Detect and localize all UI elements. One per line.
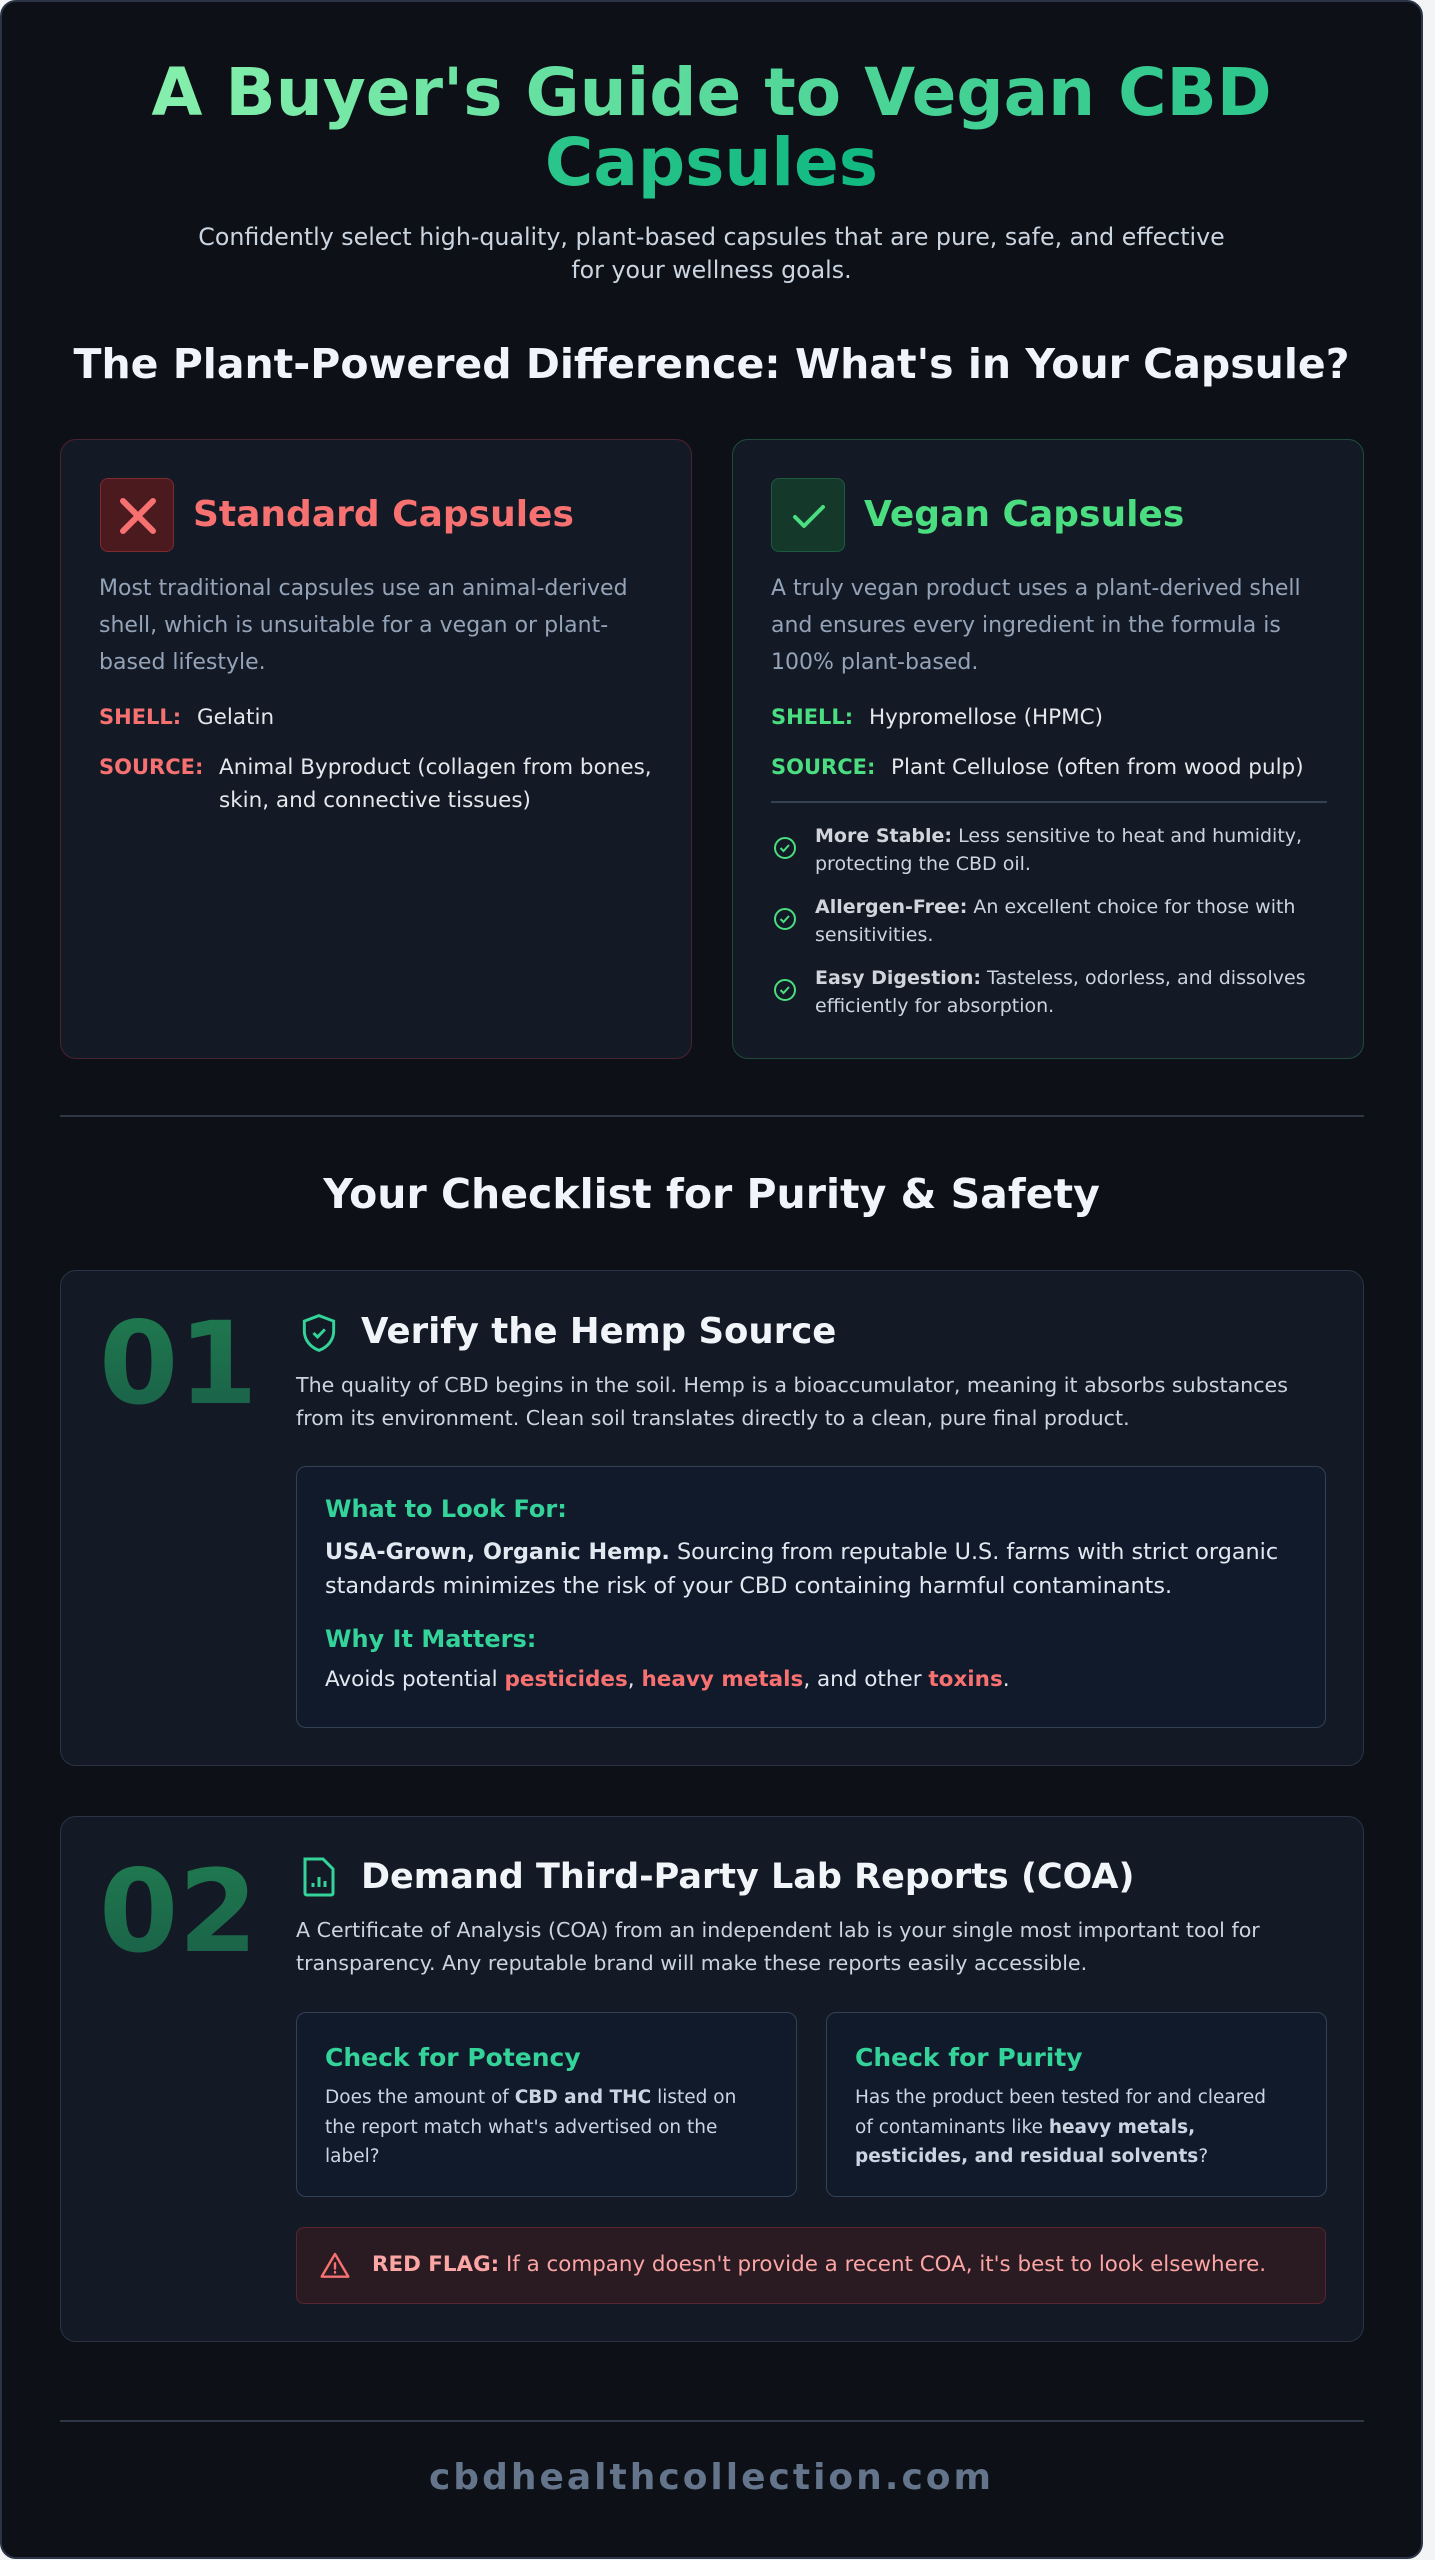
bullet: more stable: More Stable: Less sensitive to heat and humidity, protecting the CBD oil. — [815, 825, 1302, 875]
description: Most traditional capsules use an animal-derived shell, which is unsuitable for a vegan or plant-based lifestyle. — [99, 576, 628, 675]
box: purity: Check for Purity — [855, 2043, 1083, 2072]
section heading: checklist: Your Checklist for Purity & Safety — [323, 1170, 1100, 1218]
panel: vegan capsules — [732, 439, 1364, 1059]
icon: check — [771, 478, 845, 552]
spec: shell: SHELL: — [771, 705, 853, 729]
spec: shell — [99, 705, 274, 730]
panel: step 01 — [60, 1270, 1364, 1766]
section heading: difference: The Plant-Powered Difference: What's in Your Capsule? — [73, 340, 1350, 388]
step number 02: 02 — [99, 1845, 258, 1978]
box: purity — [826, 2012, 1327, 2197]
why it matters: Why It Matters: — [325, 1625, 536, 1653]
subtitle: Confidently select high-quality, plant-based capsules that are pure, safe, and effective — [198, 223, 1225, 251]
icon: x mark — [100, 478, 174, 552]
title: Capsules — [545, 124, 878, 201]
panel: standard capsules — [60, 439, 692, 1059]
paragraph: A Certificate of Analysis (COA) from an independent lab is your single most important tool for transparency. Any reputable brand will make these reports easily accessible. — [296, 1918, 1260, 1975]
callout: red flag — [296, 2227, 1326, 2304]
subtitle: for your wellness goals. — [571, 256, 852, 284]
spec: shell: Gelatin — [197, 705, 274, 730]
heading: lab reports: Demand Third-Party Lab Reports (COA) — [361, 1857, 1135, 1897]
box: potency: Check for Potency — [325, 2043, 581, 2072]
heading: standard: Standard Capsules — [193, 494, 574, 535]
what to look for: What to Look For: — [325, 1495, 567, 1523]
callout: red flag: RED FLAG: If a company doesn't provide a recent COA, it's best to look elsewhere. — [372, 2252, 1266, 2277]
info box: Avoids potential pesticides, heavy metals, and other toxins. — [325, 1667, 1010, 1692]
subtitle — [198, 223, 1225, 284]
spec: shell: Hypromellose (HPMC) — [869, 705, 1103, 730]
bullet: allergen-free: Allergen-Free: An excellent choice for those with sensitivities. — [815, 896, 1295, 946]
paragraph: The quality of CBD begins in the soil. Hemp is a bioaccumulator, meaning it absorbs substances from its environment. Clean soil translates directly to a clean, pure final product. — [296, 1373, 1288, 1430]
spec: source: SOURCE: — [99, 755, 203, 779]
icon: shield — [302, 1314, 336, 1352]
spec: source: SOURCE: — [771, 755, 875, 779]
step number 01: 01 — [99, 1297, 258, 1430]
footer: website: cbdhealthcollection.com — [429, 2457, 994, 2498]
spec: source: Plant Cellulose (often from wood pulp) — [891, 755, 1304, 780]
title — [151, 54, 1272, 201]
spec: shell: SHELL: — [99, 705, 181, 729]
info box: USA-Grown, Organic Hemp. Sourcing from reputable U.S. farms with strict organic standards minimizes the risk of your CBD containing harmful contaminants. — [325, 1539, 1278, 1599]
box: potency — [296, 2012, 797, 2197]
panel: step 02 — [60, 1816, 1364, 2342]
box: potency: Does the amount of CBD and THC listed on the report match what's advertised on the label? — [325, 2087, 736, 2167]
title: A Buyer's Guide to Vegan CBD — [151, 54, 1272, 131]
box: purity: Has the product been tested for and cleared of contaminants like heavy metals, pesticides, and residual solvents? — [855, 2087, 1266, 2167]
icon: report — [304, 1858, 334, 1896]
heading: verify hemp source: Verify the Hemp Source — [361, 1311, 836, 1352]
bullet: easy digestion: Easy Digestion: Tasteless, odorless, and dissolves efficiently for absorption. — [815, 967, 1306, 1017]
icon: warning — [320, 2252, 350, 2278]
description: A truly vegan product uses a plant-derived shell and ensures every ingredient in the formula is 100% plant-based. — [771, 576, 1301, 675]
info box — [296, 1466, 1326, 1728]
spec: source: Animal Byproduct (collagen from bones, skin, and connective tissues) — [219, 755, 652, 813]
heading: vegan: Vegan Capsules — [864, 494, 1184, 535]
